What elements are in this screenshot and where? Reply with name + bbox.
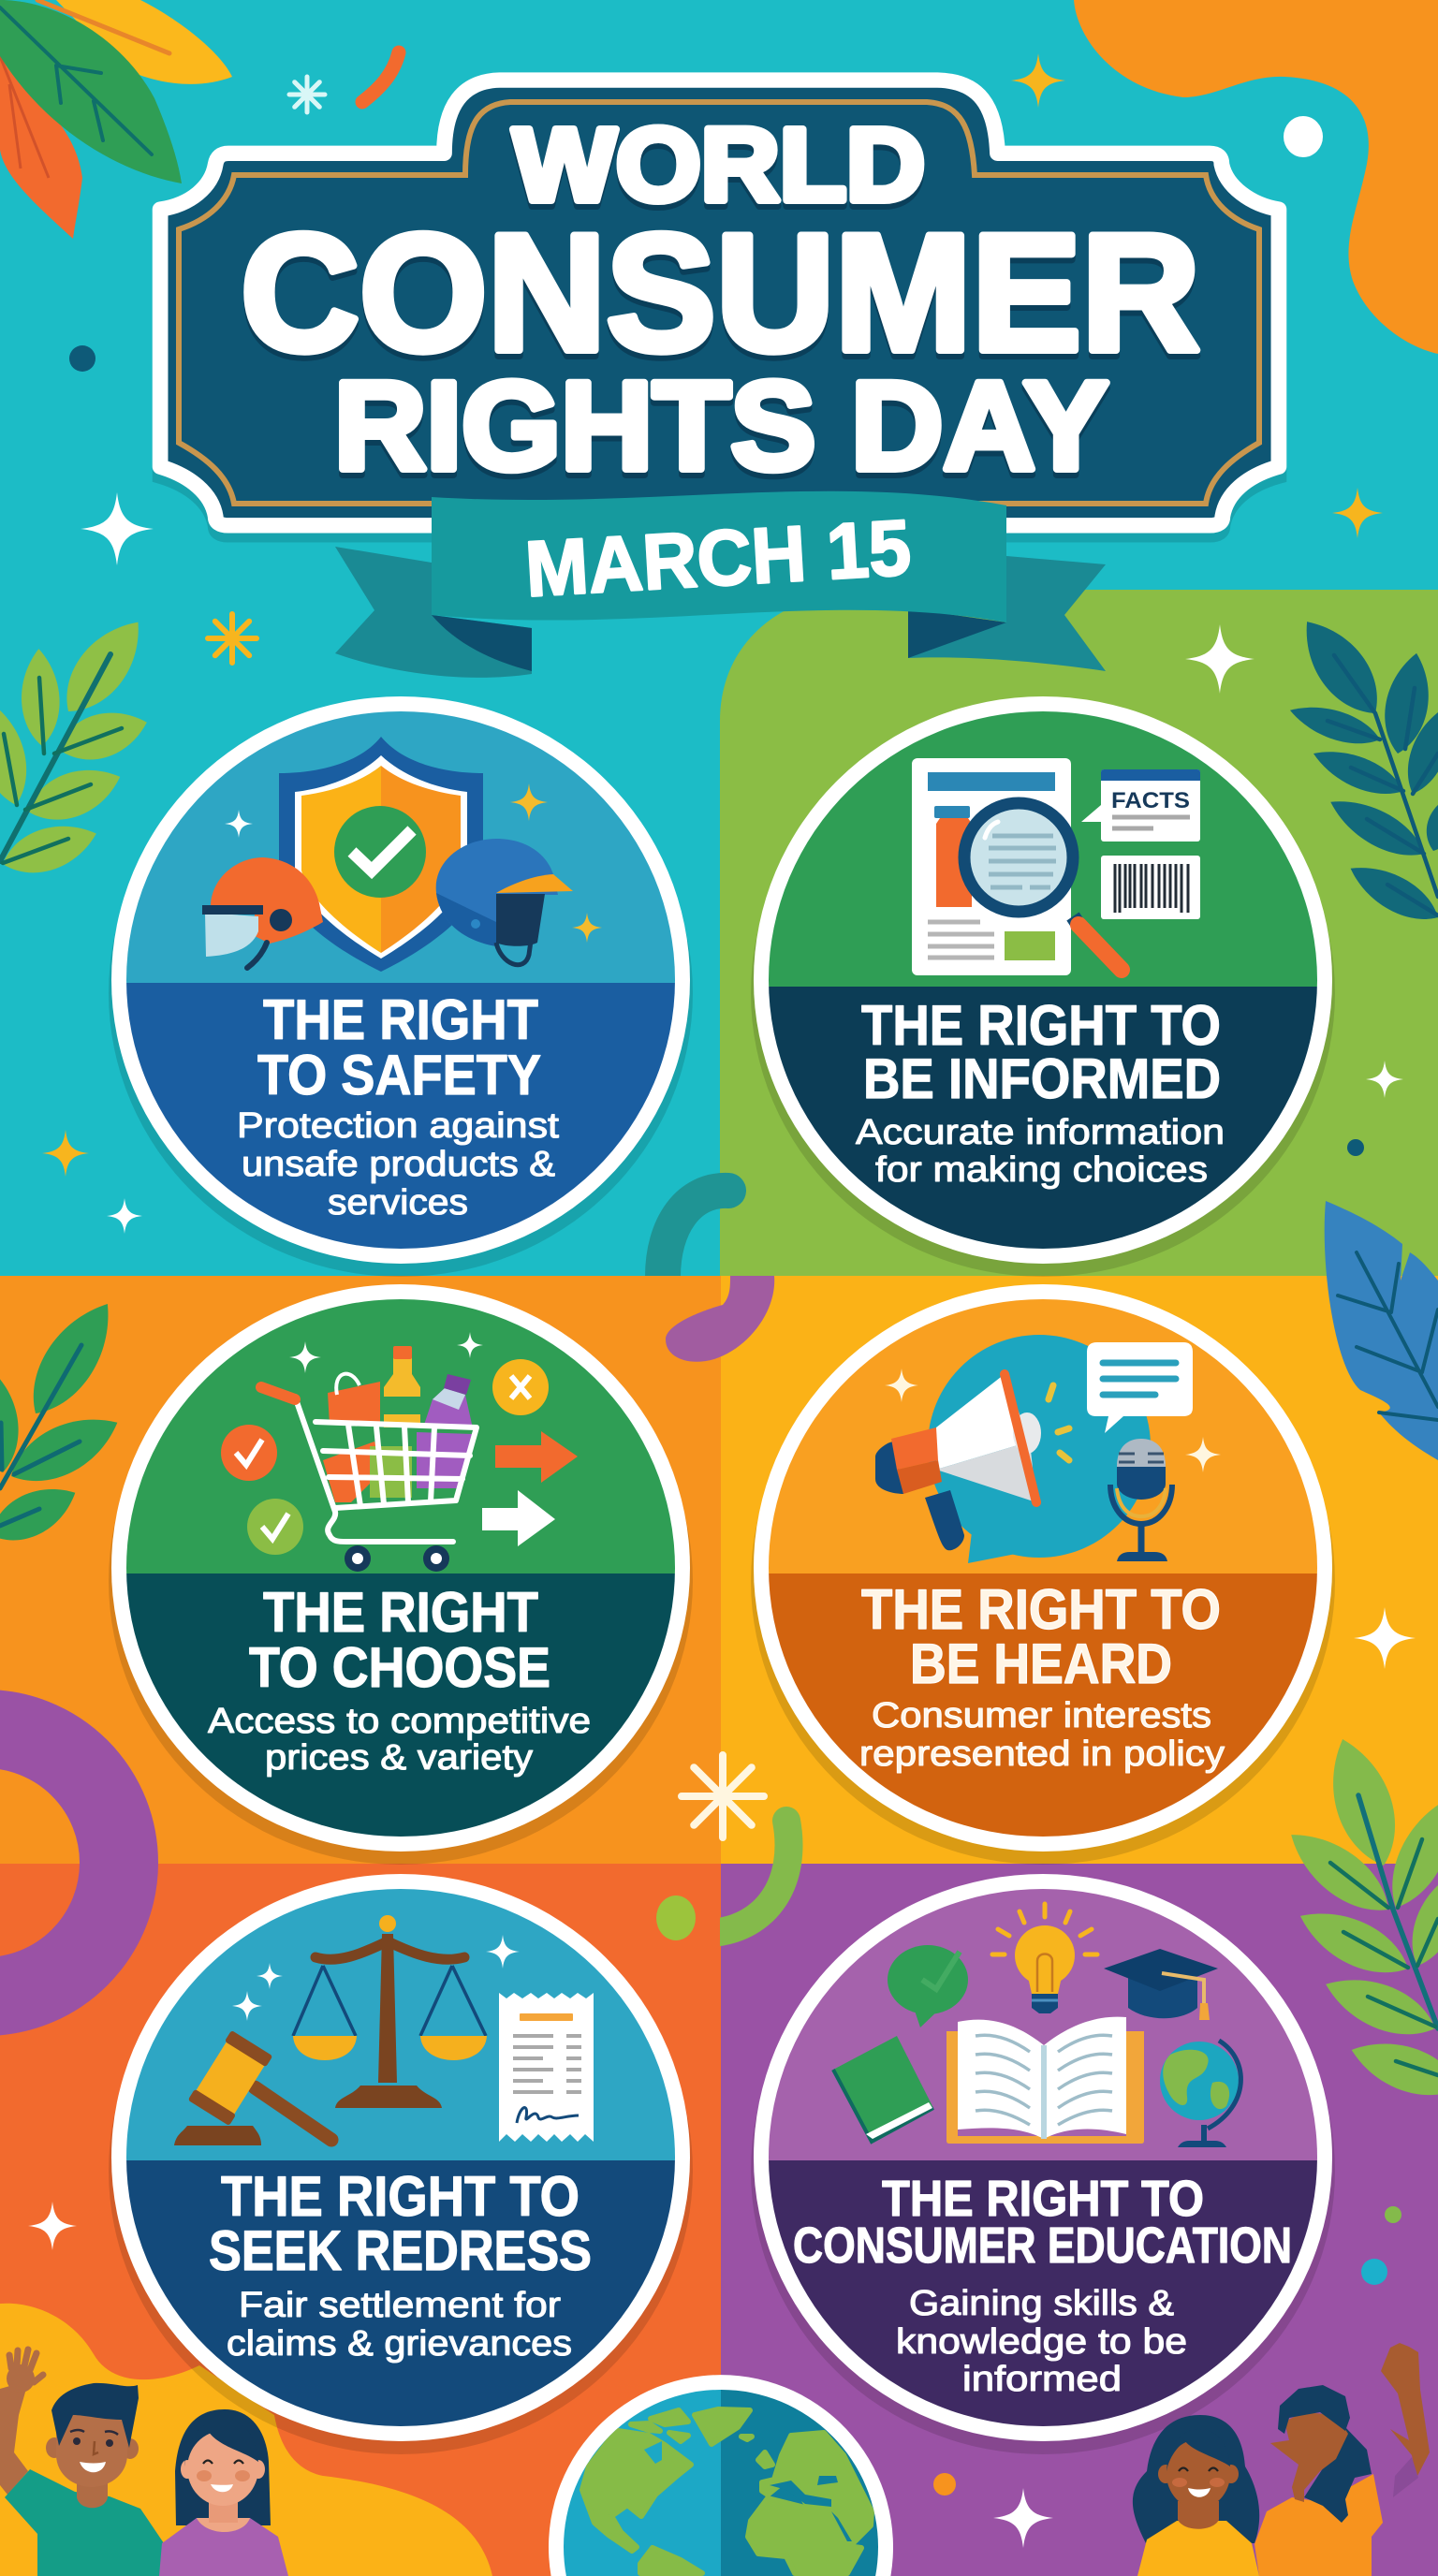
panel: the right to be informed <box>751 696 1335 1277</box>
title: World Consumer Rights Day: CONSUMER <box>241 199 1200 386</box>
ribbon: March 15: MARCH 15 <box>523 503 913 613</box>
people: man and woman, left <box>0 2349 288 2576</box>
text: heard: BE HEARD <box>910 1632 1172 1695</box>
icon: books, bulb, cap and globe <box>833 1904 1240 2147</box>
panel: the right to seek redress <box>109 1874 693 2454</box>
panel: the right to choose <box>109 1284 693 1865</box>
panel: the right to safety <box>109 696 693 1277</box>
icon: megaphone and microphone <box>875 1335 1221 1563</box>
title: World Consumer Rights Day: RIGHTS DAY <box>334 357 1108 496</box>
text: informed: for making choices <box>875 1150 1208 1190</box>
text: choose: prices & variety <box>265 1738 533 1778</box>
text: informed <box>856 994 1225 1190</box>
decorative purple blob <box>666 1276 774 1362</box>
text: safety: unsafe products & <box>242 1145 555 1184</box>
globe <box>549 2375 893 2576</box>
title: World Consumer Rights Day <box>241 108 1200 496</box>
text: choose: Access to competitive <box>208 1702 591 1741</box>
text: choose: THE RIGHT <box>263 1581 538 1644</box>
text: safety: services <box>328 1183 468 1222</box>
leaves: top left <box>0 0 232 239</box>
text: redress: SEEK REDRESS <box>209 2219 592 2282</box>
text: heard: THE RIGHT TO <box>861 1578 1221 1641</box>
leaves: left branch middle <box>0 1291 128 1554</box>
leaves: right branch upper <box>1285 607 1438 932</box>
text: education <box>793 2171 1292 2399</box>
title plaque <box>160 80 1279 534</box>
text: education: Gaining skills & <box>909 2284 1174 2323</box>
text: choose: TO CHOOSE <box>249 1636 550 1699</box>
text: education: THE RIGHT TO <box>882 2171 1204 2227</box>
icon: shield and helmets <box>202 737 602 972</box>
text: safety: TO SAFETY <box>257 1044 541 1106</box>
leaf: blue <box>1325 1201 1438 1460</box>
text: informed: BE INFORMED <box>863 1047 1221 1110</box>
text: heard <box>859 1578 1225 1774</box>
panel: the right to be heard <box>751 1284 1335 1865</box>
text: education: knowledge to be <box>896 2322 1187 2362</box>
text: redress: claims & grievances <box>227 2324 572 2364</box>
text: education: CONSUMER EDUCATION <box>793 2217 1292 2274</box>
text: safety: Protection against <box>237 1106 559 1146</box>
leaves: left branch upper <box>0 607 156 884</box>
ribbon: March 15 <box>335 491 1106 678</box>
title: World Consumer Rights Day: WORLD <box>513 108 925 223</box>
text: safety: THE RIGHT <box>263 988 538 1051</box>
text: heard: Consumer interests <box>872 1696 1211 1735</box>
decorative green arc <box>712 1821 788 1933</box>
icon: label and magnifier <box>912 758 1200 975</box>
text: choose <box>208 1581 591 1778</box>
leaves: right branch lower <box>1278 1731 1438 2108</box>
text: redress: Fair settlement for <box>239 2286 561 2325</box>
text: redress <box>209 2165 592 2364</box>
text: heard: represented in policy <box>859 1734 1225 1774</box>
text: redress: THE RIGHT TO <box>221 2165 580 2228</box>
icon: shopping cart <box>221 1332 578 1572</box>
text: education: informed <box>962 2360 1122 2399</box>
text: safety <box>237 988 559 1222</box>
people: two women, right <box>1133 2343 1430 2576</box>
text: informed: Accurate information <box>856 1113 1225 1152</box>
text: informed: THE RIGHT TO <box>861 994 1221 1057</box>
panel: the right to consumer education <box>751 1874 1335 2454</box>
icon: scales, gavel and receipt <box>174 1915 594 2145</box>
icon: label and magnifier: FACTS <box>1111 788 1190 813</box>
